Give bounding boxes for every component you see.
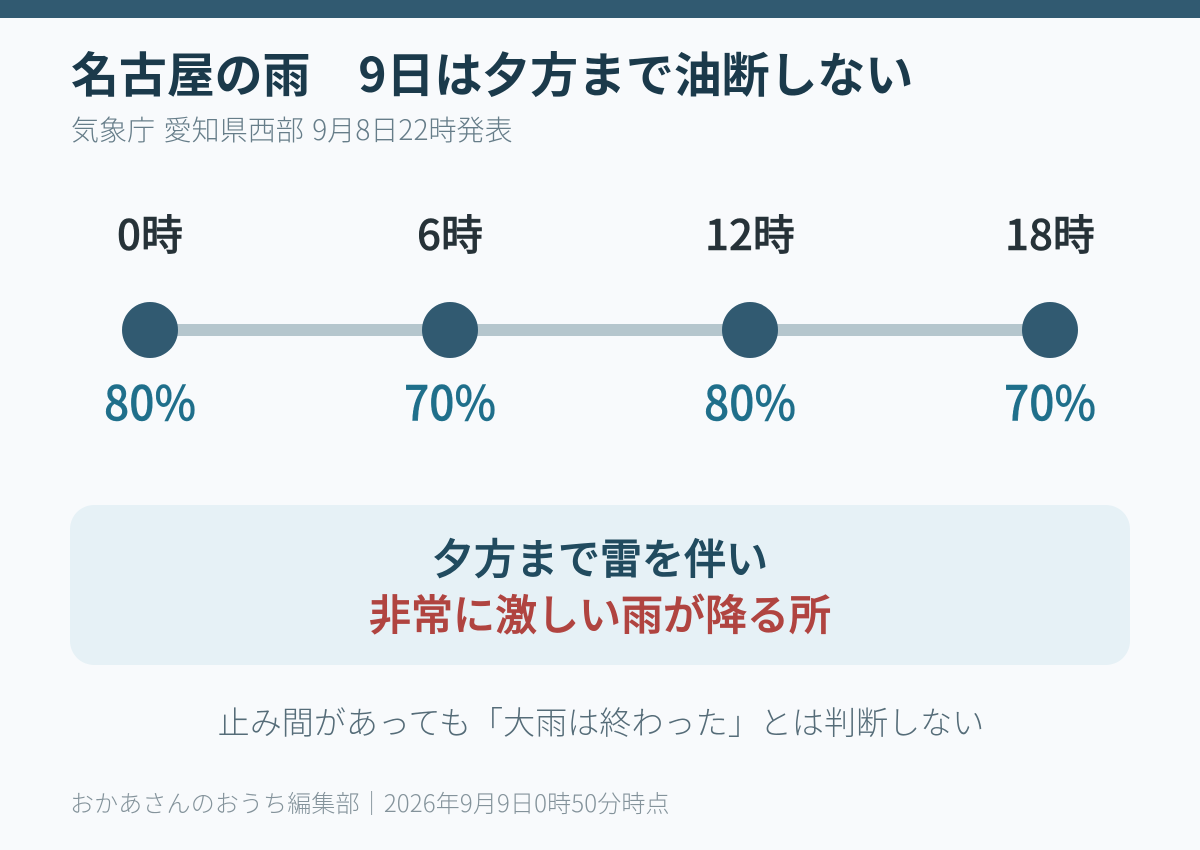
subtitle: 気象庁 愛知県西部 9月8日22時発表 xyxy=(71,109,513,149)
time point: 6時: 6時 xyxy=(417,202,483,263)
top bar xyxy=(0,0,1200,18)
time point: 0時: 0時 xyxy=(117,202,183,263)
note: 止み間があっても「大雨は終わった」とは判断しない xyxy=(218,698,984,744)
time point: 0時 xyxy=(104,202,196,434)
time point: 0時: 80% xyxy=(104,364,196,434)
timeline xyxy=(104,202,1096,434)
time point: 6時: 70% xyxy=(404,364,496,434)
callout panel xyxy=(70,505,1130,665)
title: 名古屋の雨 9日は夕方まで油断しない xyxy=(71,36,913,106)
time point: 12時: 12時 xyxy=(705,202,795,263)
time point: 12時 xyxy=(704,202,796,434)
callout line 2: 非常に激しい雨が降る所 xyxy=(369,582,831,643)
footer credit: おかあさんのおうち編集部｜2026年9月9日0時50分時点 xyxy=(70,784,670,819)
time point: 18時 xyxy=(1004,202,1096,434)
time point: 18時: 18時 xyxy=(1005,202,1095,263)
time point: 18時: 70% xyxy=(1004,364,1096,434)
time point: 12時: 80% xyxy=(704,364,796,434)
time point: 6時 xyxy=(404,202,496,434)
timeline connector xyxy=(150,324,1050,336)
callout line 1: 夕方まで雷を伴い xyxy=(432,526,768,587)
